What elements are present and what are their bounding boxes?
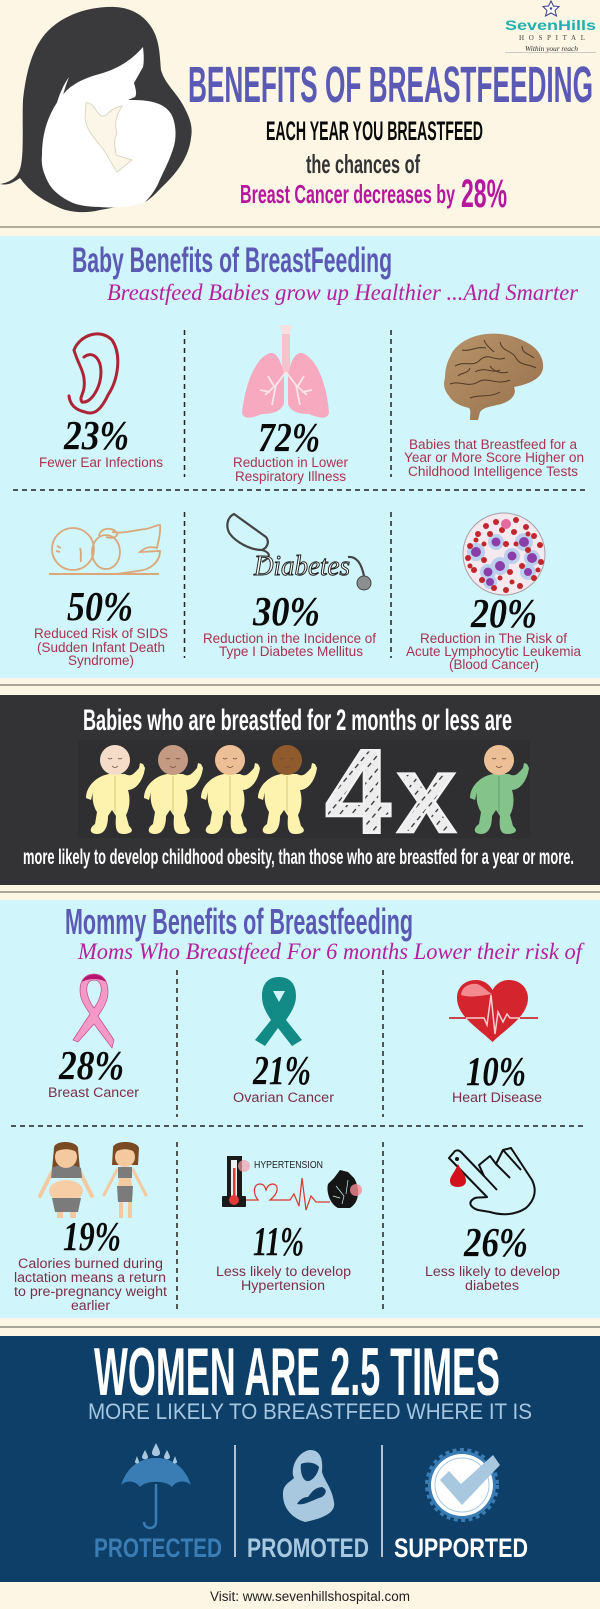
text: 4x: x (397, 733, 456, 856)
icon: finger prick hand (449, 1148, 535, 1214)
icon: lungs (242, 325, 329, 418)
icon: stethoscope with diabetes lettering: Diabetes (253, 551, 350, 582)
caption: leukemia: (Blood Cancer) (449, 657, 539, 672)
icon: stethoscope with diabetes lettering (227, 514, 371, 590)
caption: calories burned: Calories burned during (18, 1256, 163, 1271)
caption: ovarian cancer: Ovarian Cancer (233, 1090, 335, 1105)
icon: hypertension graphic (222, 1156, 362, 1210)
icon: pink ribbon (73, 974, 114, 1048)
logo: SevenHills Hospital: HOSPITAL (519, 34, 585, 42)
stat: 20%: 20% (470, 590, 537, 636)
logo: SevenHills Hospital: SevenHills (505, 17, 596, 33)
headline line three: Breast Cancer decreases by (240, 179, 455, 209)
caption: diabetes: Type I Diabetes Mellitus (219, 644, 363, 659)
header panel (0, 1, 596, 216)
label: promoted: PROMOTED (247, 1533, 369, 1563)
caption: intelligence tests: Year or More Score Higher on (404, 450, 584, 465)
label: supported: SUPPORTED (394, 1533, 528, 1563)
icon: ear (69, 334, 118, 413)
icon: blood cells (463, 513, 545, 595)
caption: diabetes: Reduction in the Incidence of (203, 631, 376, 646)
logo: SevenHills Hospital: Within your reach (525, 44, 578, 53)
caption: SIDS: Reduced Risk of SIDS (34, 626, 168, 641)
icon: brain (444, 334, 543, 420)
icon: teal ribbon (255, 977, 302, 1046)
caption: SIDS: Syndrome) (68, 653, 134, 668)
statistic: 28%: 28% (461, 172, 507, 216)
caption: leukemia (406, 631, 581, 672)
icon: yellow baby one (86, 745, 145, 834)
text: 4x: 4 (325, 725, 391, 859)
caption: SIDS: (Sudden Infant Death (37, 640, 165, 655)
logo: SevenHills Hospital (505, 1, 596, 53)
stat: 28%: 28% (58, 1042, 124, 1088)
caption: diabetes risk: diabetes (465, 1278, 519, 1293)
caption: heart disease: Heart Disease (452, 1090, 542, 1105)
caption: diabetes risk: Less likely to develop (425, 1264, 560, 1279)
caption: calories burned: lactation means a return (14, 1270, 166, 1285)
caption: intelligence tests: Babies that Breastfeed for a (409, 437, 577, 452)
caption: intelligence tests: Childhood Intelligence Tests (408, 464, 578, 479)
caption: respiratory illness: Respiratory Illness (235, 469, 346, 484)
caption: SIDS (34, 626, 168, 668)
subheading: MORE LIKELY TO BREASTFEED WHERE IT IS (88, 1399, 532, 1424)
icon: check badge (426, 1450, 500, 1520)
panel: baby benefits (0, 236, 600, 678)
panel: women are 2.5 times (0, 1334, 600, 1582)
subheading: Moms Who Breastfeed For 6 months Lower their risk of (77, 939, 586, 964)
caption: leukemia: Acute Lymphocytic Leukemia (406, 644, 581, 659)
caption: calories burned: earlier (71, 1298, 111, 1313)
caption: hypertension: Less likely to develop (216, 1264, 351, 1279)
stat: 21%: 21% (252, 1047, 311, 1093)
icon: umbrella (121, 1443, 191, 1528)
caption: ear infections: Fewer Ear Infections (39, 455, 163, 470)
caption: respiratory illness: Reduction in Lower (233, 455, 348, 470)
icon: hypertension graphic: HYPERTENSION (254, 1160, 323, 1171)
stat: 23%: 23% (63, 412, 129, 458)
icon: yellow baby two (144, 745, 203, 834)
icon: sleeping baby (49, 525, 160, 574)
caption: breast cancer: Breast Cancer (48, 1085, 140, 1100)
icon: mother and baby silhouette (0, 7, 192, 212)
icon: green baby (470, 745, 529, 834)
heading: baby benefits: Baby Benefits of BreastFeeding (72, 241, 392, 280)
subheading: Breastfeed Babies grow up Healthier ...And Smarter (107, 280, 579, 305)
headline line two: the chances of (306, 149, 420, 179)
caption: leukemia: Reduction in The Risk of (420, 631, 567, 646)
text: 4x (325, 725, 456, 859)
stat: 30%: 30% (252, 588, 320, 634)
stat: 11%: 11% (253, 1218, 304, 1264)
icon: heart with pulse (449, 980, 538, 1042)
panel: mommy benefits (0, 900, 600, 1318)
stat: 10%: 10% (466, 1048, 526, 1094)
caption: calories burned (14, 1256, 167, 1313)
caption: hypertension: Hypertension (241, 1278, 325, 1293)
footer link text: Visit: www.sevenhillshospital.com (210, 1589, 410, 1604)
icon: before and after women (40, 1142, 146, 1218)
caption: diabetes risk (425, 1264, 560, 1293)
caption: respiratory illness (233, 455, 348, 484)
label: protected: PROTECTED (94, 1533, 222, 1563)
icon: yellow baby four (258, 745, 317, 834)
stat: 50%: 50% (67, 583, 133, 629)
stat: 26%: 26% (463, 1219, 528, 1265)
panel: childhood obesity (0, 695, 600, 885)
caption: calories burned: to pre-pregnancy weight (14, 1284, 167, 1299)
icon: yellow baby three (201, 745, 260, 834)
stat: 19%: 19% (63, 1213, 121, 1259)
stat: 72%: 72% (258, 414, 320, 460)
caption: diabetes (203, 631, 376, 659)
caption: hypertension (216, 1264, 351, 1293)
caption: intelligence tests (404, 437, 584, 479)
icon: mother nursing (283, 1450, 334, 1522)
